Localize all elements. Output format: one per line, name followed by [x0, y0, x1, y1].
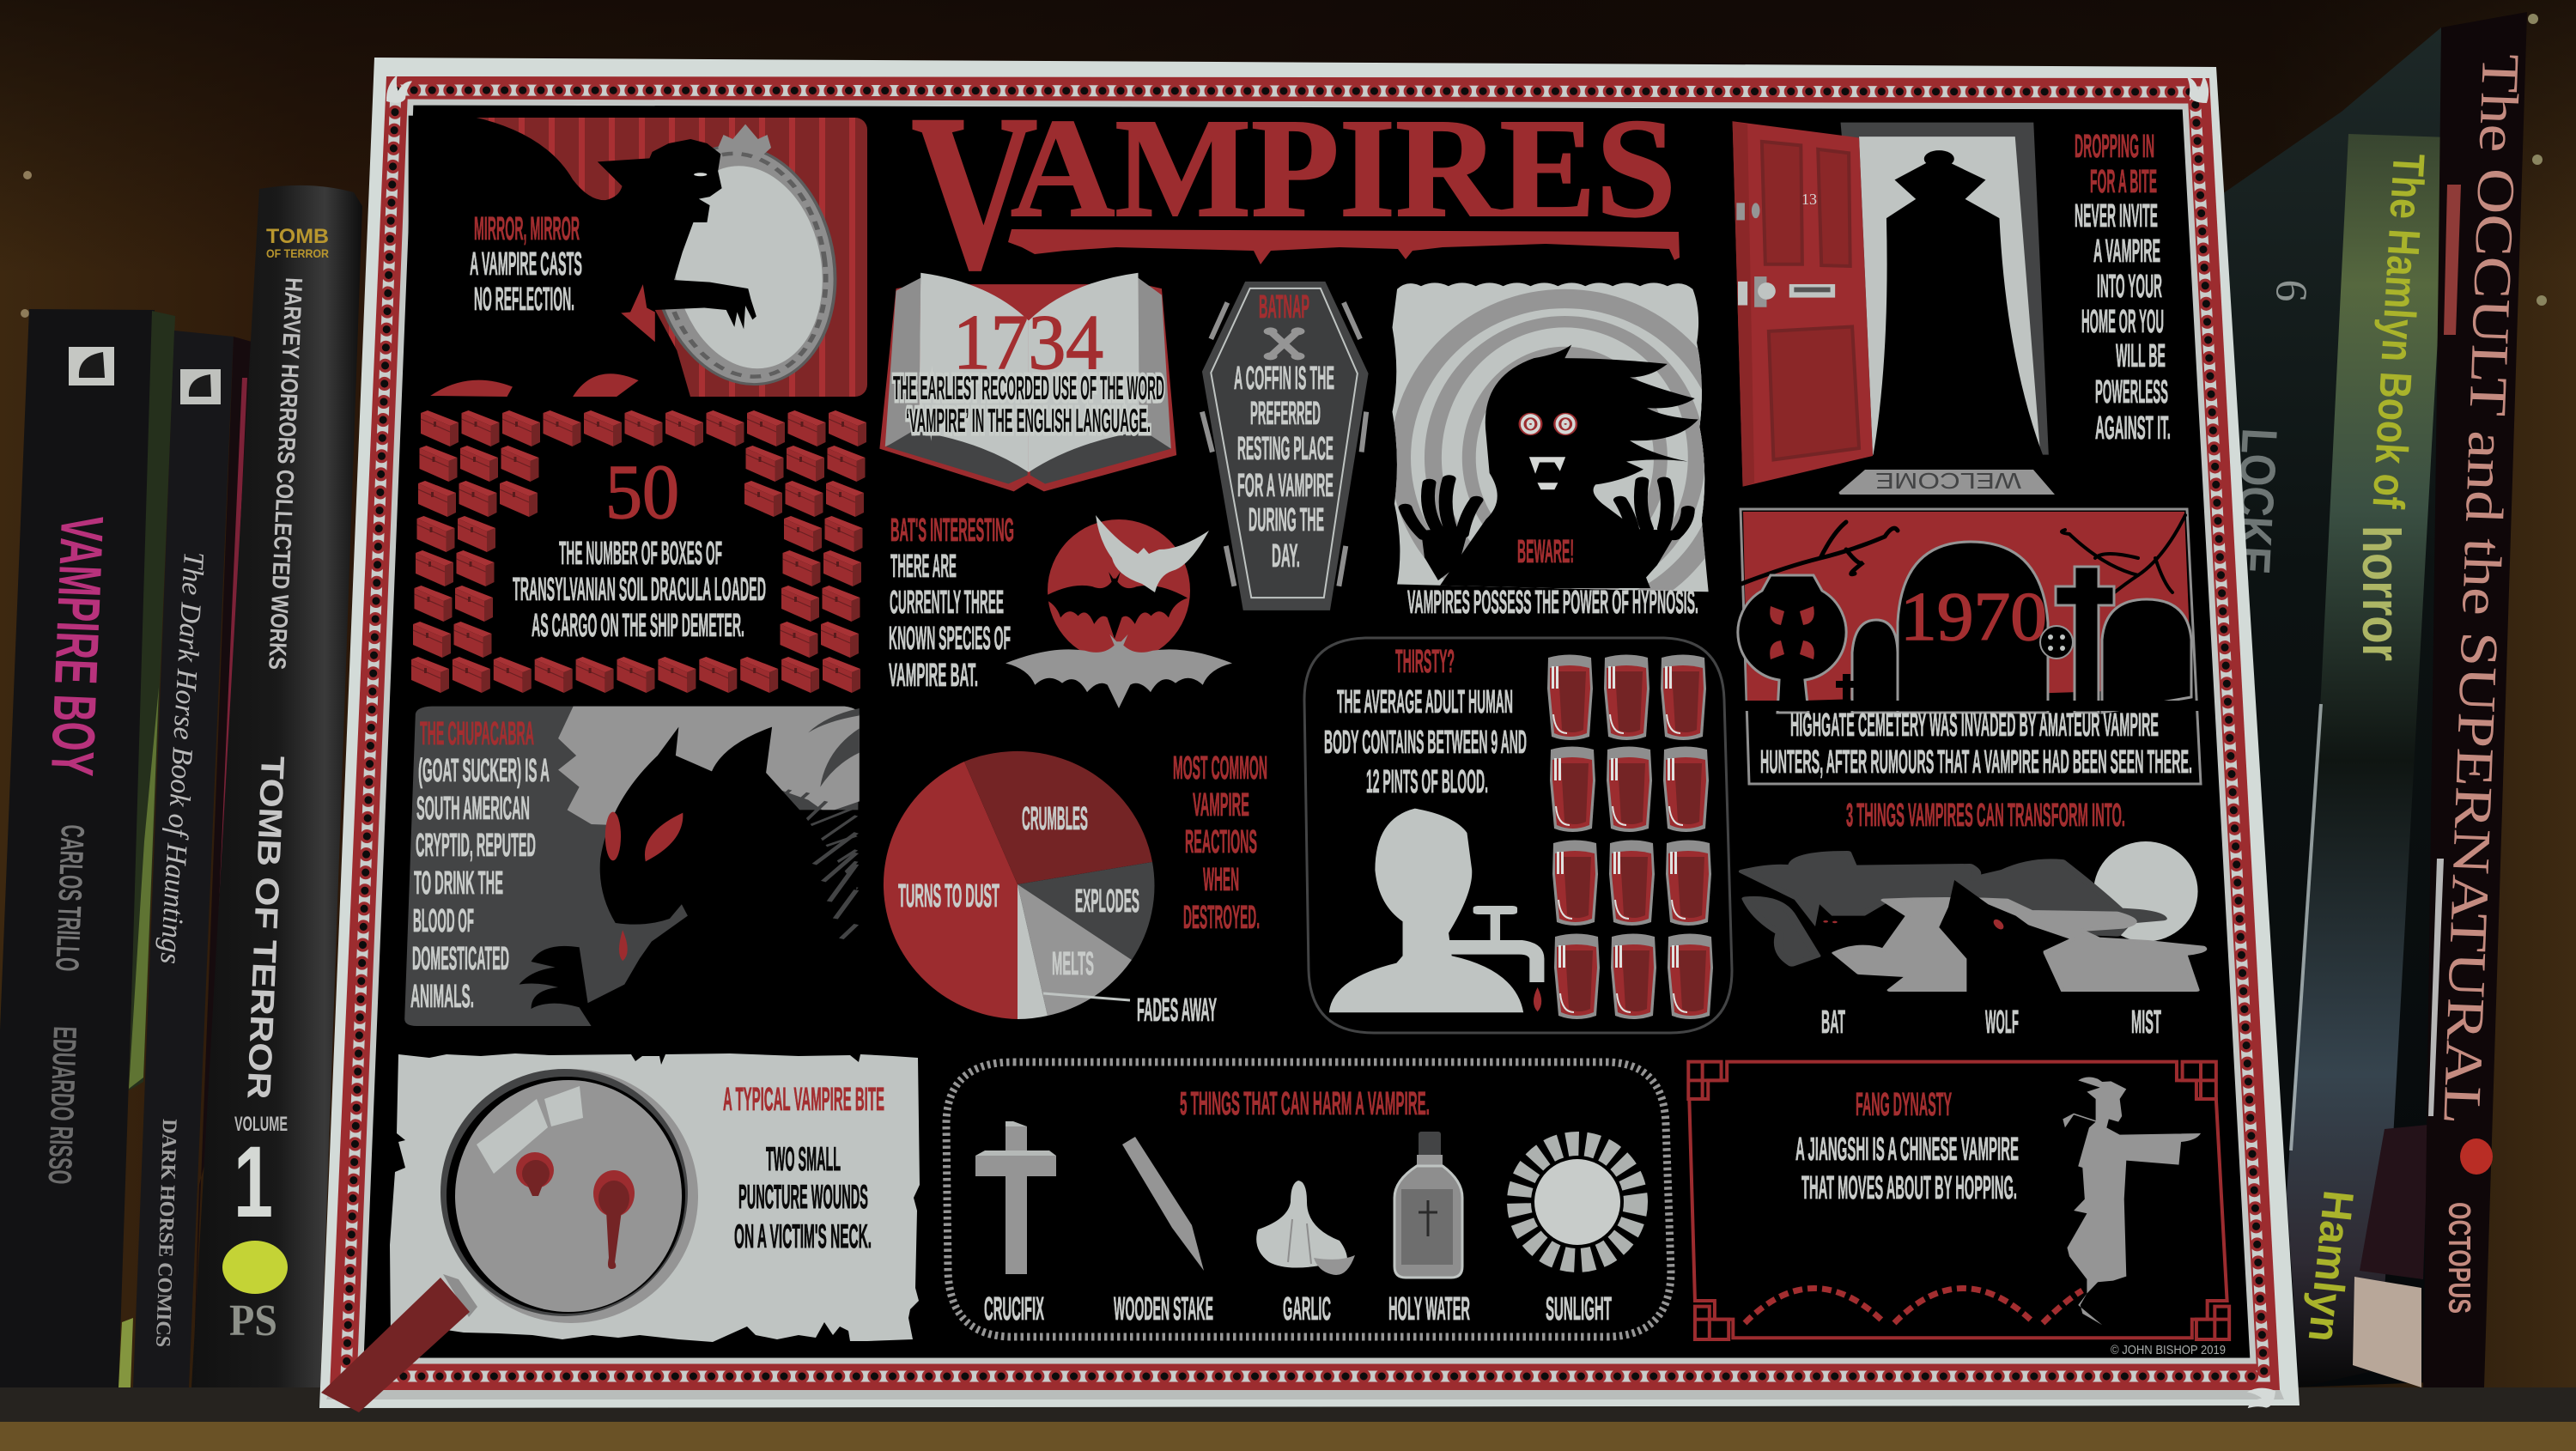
- text: POWERLESS: [2095, 374, 2168, 410]
- rope border: [946, 1062, 1671, 1337]
- frame: [1741, 509, 2201, 784]
- panel: chupacabra: (GOAT SUCKER) IS A: [418, 753, 550, 789]
- dripping underline: [1008, 229, 1680, 264]
- text: thirsty: [1324, 644, 1527, 800]
- panel: 1734 book: 1734: [953, 299, 1103, 386]
- illustration: chupacabra: [404, 707, 860, 1026]
- labels: HOLY WATER: [1388, 1291, 1470, 1327]
- panel: vampire bite: [321, 1053, 920, 1412]
- book: Vampire Boy: EDUARDO RISSO: [41, 1026, 82, 1185]
- panel: five things that harm: 5 THINGS THAT CAN HARM A VAMPIRE.: [1180, 1086, 1430, 1122]
- text: chupacabra: ANIMALS.: [410, 979, 474, 1015]
- text: DROPPING IN: [2075, 129, 2154, 165]
- labels: WOODEN STAKE: [1114, 1291, 1213, 1327]
- text: bat facts: [889, 513, 1014, 694]
- panel: bats: KNOWN SPECIES OF: [889, 621, 1011, 657]
- panel: thirsty: THE AVERAGE ADULT HUMAN: [1337, 684, 1513, 720]
- panel: door: 13: [1801, 191, 1817, 208]
- panel: five things that harm: SUNLIGHT: [1546, 1291, 1612, 1327]
- illustration: hypnotic vampire: [1393, 282, 1709, 592]
- text: DESTROYED.: [1183, 900, 1260, 936]
- book: Locke and Key: 6: [2266, 279, 2316, 303]
- text: bite: TWO SMALL: [766, 1141, 841, 1178]
- labels: WOLF: [1985, 1005, 2019, 1041]
- book: The Occult and the Supernatural: The OCCULT and the SUPERNATURAL: [2432, 52, 2530, 1126]
- vampire silhouette: [409, 116, 756, 398]
- title: [911, 69, 1680, 316]
- icons: twelve pints of blood: [1547, 654, 1713, 1019]
- text: hypnosis: BEWARE!: [1517, 534, 1574, 570]
- book: Tomb of Terror: 1: [234, 1126, 273, 1239]
- panel: highgate 1970: 1970: [1900, 580, 2047, 655]
- text: chupacabra: BLOOD OF: [413, 903, 474, 939]
- text: most common reactions: [1173, 750, 1267, 936]
- panel: vampire bite: PUNCTURE WOUNDS: [738, 1179, 868, 1216]
- labels: [1821, 1005, 2161, 1041]
- illustration: doorway with vampire: [1733, 121, 2049, 487]
- icon: wooden stake: [1122, 1137, 1204, 1271]
- book: Tomb of Terror: VOLUME: [234, 1113, 288, 1136]
- panel: bats: BAT'S INTERESTING: [890, 513, 1014, 549]
- icon: garlic: [1256, 1181, 1355, 1275]
- title: V: [911, 69, 1038, 316]
- panel: chupacabra: CRYPTID, REPUTED: [416, 828, 536, 864]
- book: Dark Horse Book of Hauntings: DARK HORSE COMICS: [151, 1119, 180, 1347]
- icon: red moon with bats: [1005, 515, 1232, 708]
- text: batnap: DAY.: [1272, 538, 1300, 574]
- text: batnap: BATNAP: [1259, 289, 1309, 325]
- text: chupacabra: [410, 716, 550, 1015]
- panel: mirror, mirror: A VAMPIRE CASTS: [470, 246, 582, 282]
- text: bat facts: VAMPIRE BAT.: [889, 658, 978, 694]
- text: thirsty: THIRSTY?: [1395, 644, 1455, 680]
- panel: mirror, mirror: MIRROR, MIRROR: [474, 211, 580, 247]
- icon: human head with tap: [1329, 809, 1544, 1012]
- panel: thirsty: [1304, 638, 1732, 1033]
- text: dropping in: [2075, 129, 2171, 446]
- panel: transformations: [1743, 798, 2204, 1041]
- icon: ornate mirror: [638, 124, 850, 392]
- book: Vampire Boy: VAMPIRE BOY: [39, 514, 116, 777]
- icon: sun: [1519, 1144, 1636, 1260]
- panel: 50 boxes of soil: TRANSYLVANIAN SOIL DRACULA LOADED: [513, 572, 766, 608]
- pie chart: vampire reactions: MELTS: [1052, 946, 1094, 982]
- panel: 50 boxes of soil: [411, 410, 866, 693]
- text: fang dynasty: FANG DYNASTY: [1856, 1087, 1952, 1123]
- text: highgate: [1760, 707, 2192, 780]
- frame with key corners: [1688, 1062, 2229, 1339]
- panel: coffin: DURING THE: [1249, 502, 1324, 538]
- icon: coffin: [1202, 282, 1369, 610]
- striped wall: [430, 118, 867, 397]
- text: INTO YOUR: [2097, 269, 2162, 305]
- text: A VAMPIRE: [2093, 234, 2160, 270]
- book: Hamlyn Book of Horror: horror: [2351, 525, 2410, 661]
- panel: coffin: A COFFIN IS THE: [1234, 361, 1334, 397]
- labels: CRUCIFIX: [984, 1291, 1044, 1327]
- book: The Occult and the Supernatural: OCTOPUS: [2442, 1202, 2477, 1314]
- text: REACTIONS: [1185, 824, 1257, 860]
- text: hypnosis: [1407, 534, 1698, 621]
- text: fang dynasty: [1795, 1087, 2019, 1206]
- text: most common reactions: WHEN: [1203, 862, 1239, 898]
- panel: coffin: PREFERRED: [1250, 396, 1321, 432]
- book: Locke and Key: LOCKE: [2224, 427, 2287, 575]
- book: Vampire Boy: [0, 309, 175, 1387]
- panel: vampire bite: ON A VICTIM'S NECK.: [734, 1218, 872, 1255]
- book: Vampire Boy: CARLOS TRILLO: [48, 824, 90, 972]
- icon: jiangshi silhouette: [2063, 1078, 2201, 1325]
- labels: [984, 1291, 1612, 1327]
- text: chupacabra: DOMESTICATED: [412, 941, 509, 977]
- panel: bats: [889, 513, 1232, 708]
- pie chart: vampire reactions: EXPLODES: [1075, 883, 1139, 920]
- panel: highgate 1970: [1738, 509, 2202, 784]
- text: FADES AWAY: [1137, 993, 1217, 1029]
- panel: five things that harm: [946, 1062, 1671, 1337]
- book: Hamlyn Book of Horror: The Hamlyn Book of: [2362, 152, 2433, 511]
- pie chart: vampire reactions: [884, 751, 1217, 1029]
- panel: fang dynasty: [1688, 1062, 2229, 1357]
- panel: chupacabra: SOUTH AMERICAN: [416, 791, 530, 827]
- illustration: graveyard: [1738, 512, 2202, 713]
- book: Tomb of Terror: TOMB: [266, 225, 329, 248]
- book: Tomb of Terror: [191, 185, 362, 1387]
- text: HOME OR YOU: [2081, 304, 2164, 340]
- panel: 1734 book: [879, 273, 1176, 491]
- text: MOST COMMON: [1173, 750, 1267, 786]
- panel: 50 boxes of soil: 50: [605, 450, 679, 535]
- icon: crucifix: [975, 1121, 1056, 1274]
- panel: fang dynasty: A JIANGSHI IS A CHINESE VAMPIRE: [1795, 1132, 2019, 1168]
- icon: welcome mat: [1839, 468, 2055, 495]
- book: Tomb of Terror: HARVEY HORRORS COLLECTED WORKS: [264, 277, 307, 671]
- text: VAMPIRES POSSESS THE POWER OF HYPNOSIS.: [1407, 585, 1698, 621]
- book: Tomb of Terror: OF TERROR: [266, 246, 329, 260]
- text: bite: [723, 1082, 884, 1255]
- text: NEVER INVITE: [2075, 198, 2158, 234]
- poster board: [319, 58, 2300, 1418]
- panel: thirsty: 12 PINTS OF BLOOD.: [1366, 764, 1488, 800]
- panel: 50 boxes of soil: AS CARGO ON THE SHIP DEMETER.: [532, 608, 744, 644]
- text: batnap: [1234, 289, 1334, 574]
- text: AGAINST IT.: [2095, 410, 2171, 446]
- text: bat facts: THERE ARE: [890, 549, 957, 585]
- labels: BAT: [1821, 1005, 1845, 1041]
- panel: hypnosis: [1390, 277, 1740, 627]
- text: A TYPICAL VAMPIRE BITE: [723, 1082, 884, 1118]
- book: The Occult and the Supernatural: [2423, 12, 2530, 1387]
- panel: fang dynasty: © JOHN BISHOP 2019: [2111, 1343, 2226, 1357]
- panel: fang dynasty: THAT MOVES ABOUT BY HOPPING.: [1801, 1170, 2017, 1206]
- book: Tomb of Terror: PS: [229, 1296, 277, 1345]
- icon: open book: [879, 273, 1176, 491]
- book: Hamlyn Book of Horror: Hamlyn: [2300, 1188, 2363, 1345]
- panel: transformations: MIST: [2131, 1005, 2161, 1041]
- pie chart: vampire reactions: CRUMBLES: [1022, 801, 1088, 837]
- panel: bats: CURRENTLY THREE: [890, 585, 1004, 621]
- book: Hamlyn Book of Horror: [2287, 134, 2449, 1387]
- text: 3 THINGS VAMPIRES CAN TRANSFORM INTO.: [1846, 798, 2125, 834]
- text: ‘VAMPIRE’ IN THE ENGLISH LANGUAGE.: [906, 403, 1151, 440]
- panel: coffin: FOR A VAMPIRE: [1237, 468, 1334, 504]
- icon: magnifying glass: [321, 1069, 698, 1412]
- text: WILL BE: [2116, 338, 2166, 374]
- panel: thirsty: BODY CONTAINS BETWEEN 9 AND: [1324, 725, 1527, 761]
- text: FOR A BITE: [2090, 164, 2157, 200]
- icon: holy water bottle: [1394, 1132, 1462, 1278]
- panel: mirror, mirror: NO REFLECTION.: [474, 282, 574, 318]
- panel: 50 boxes of soil: THE NUMBER OF BOXES OF: [559, 536, 722, 572]
- text: most common reactions: VAMPIRE: [1193, 787, 1249, 823]
- torn paper: [390, 1053, 920, 1342]
- panel: door: [1733, 121, 2171, 495]
- text: RESTING PLACE: [1237, 431, 1334, 467]
- labels: GARLIC: [1283, 1291, 1331, 1327]
- text: THE EARLIEST RECORDED USE OF THE WORD: [893, 370, 1164, 407]
- pie chart: vampire reactions: TURNS TO DUST: [898, 878, 999, 914]
- book: Locke and Key: [2220, 27, 2456, 1387]
- book: Dark Horse Book of Hauntings: The Dark Horse Book of Hauntings: [154, 551, 210, 965]
- book: Tomb of Terror: TOMB OF TERROR: [240, 756, 290, 1100]
- illustration: bat, wolf, mist: [1743, 841, 2204, 993]
- text: chupacabra: TO DRINK THE: [414, 865, 503, 902]
- icons: 50 chests: [411, 410, 866, 693]
- icon: welcome mat: WELCOME: [1875, 468, 2021, 494]
- panel: chupacabra: [404, 707, 860, 1026]
- panel: coffin: [1202, 282, 1369, 610]
- panel: chupacabra: THE CHUPACABRA: [420, 716, 534, 752]
- panel: mirror, mirror: [409, 116, 867, 398]
- text: mirror, mirror: [470, 211, 582, 318]
- title: AMPIRES: [1011, 89, 1676, 246]
- book: Dark Horse Book of Hauntings: [133, 331, 258, 1387]
- dashed hop trail: [1745, 1288, 2082, 1323]
